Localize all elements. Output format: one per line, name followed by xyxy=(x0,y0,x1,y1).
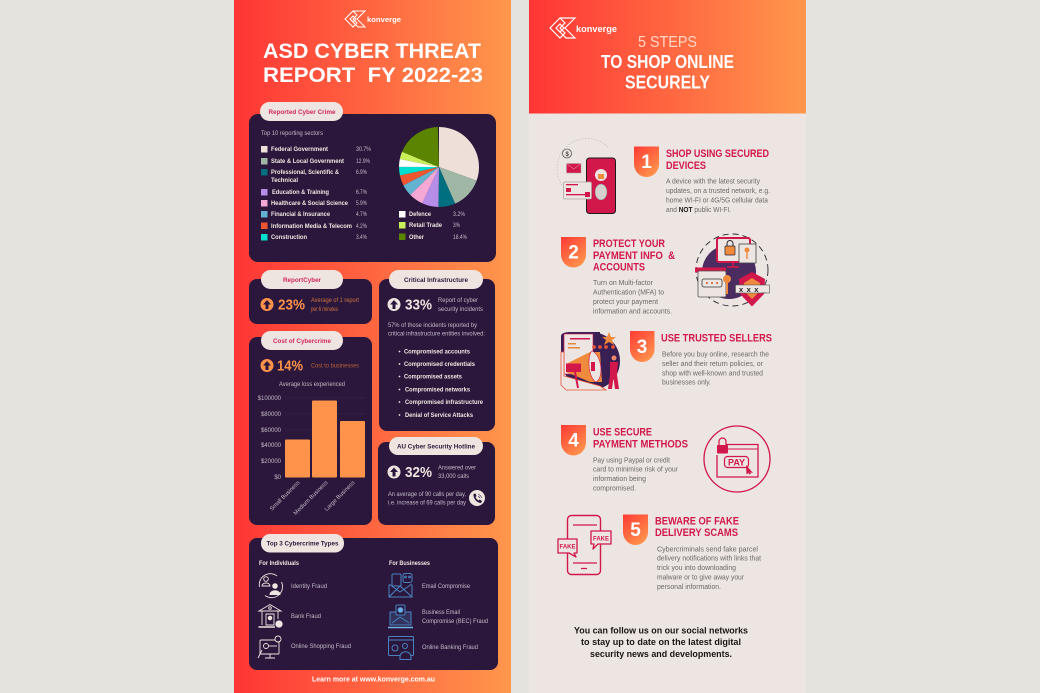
description: reports: Average of 1 report xyxy=(311,297,359,304)
legend: sectors: 6.9% xyxy=(356,169,367,176)
badge: 5 xyxy=(623,514,648,545)
closing message: You can follow us on our social networks xyxy=(574,626,748,636)
heading: step 2: PROTECT YOUR xyxy=(593,238,665,250)
panel: 5 steps xyxy=(529,0,806,693)
badge: 5: 5 xyxy=(630,520,641,541)
icon: secure payment: PAY xyxy=(728,458,745,468)
icon: fake messages phone: FAKE xyxy=(559,544,576,550)
step 4 xyxy=(561,425,770,492)
heading: 5 steps: SECURELY xyxy=(625,72,710,92)
text: step 1 xyxy=(666,176,770,214)
pill heading: hotline: AU Cyber Security Hotline xyxy=(397,444,475,450)
list: compromised items: Compromised credentials xyxy=(404,361,475,368)
heading: step 2: ACCOUNTS xyxy=(593,262,645,274)
text: step 2: information and accounts. xyxy=(593,306,672,316)
badge: 3 xyxy=(630,331,654,362)
text: step 5: trick you into downloading xyxy=(657,563,736,572)
legend: sectors: 4.7% xyxy=(356,211,367,218)
legend: sectors: Healthcare & Social Science xyxy=(271,200,348,207)
heading: 5 steps: TO SHOP ONLINE xyxy=(601,52,734,72)
legend: sectors: 30.7% xyxy=(356,146,371,153)
legend: sectors: Other xyxy=(409,234,424,241)
list: compromised items: Compromised assets xyxy=(404,374,462,380)
text: step 3: Before you buy online, research the xyxy=(662,350,769,358)
text: bank fraud: Bank Fraud xyxy=(291,613,321,620)
legend: sectors: 6.7% xyxy=(356,189,367,196)
text: step 5: malware or to give away your xyxy=(657,572,744,582)
legend: sectors: State & Local Government xyxy=(271,158,345,165)
legend: sectors xyxy=(261,146,467,241)
stat: 33%: 33% xyxy=(405,298,432,314)
description: cost: Cost to businesses xyxy=(311,362,359,370)
badge: 4: 4 xyxy=(568,430,579,452)
heading: step 4: PAYMENT METHODS xyxy=(593,438,688,450)
description: calls answered: 33,000 calls xyxy=(438,473,469,480)
badge: 3: 3 xyxy=(637,337,647,358)
title xyxy=(263,39,483,87)
bar chart: average loss: $60000 xyxy=(261,428,282,434)
pill heading: cost of cybercrime: Cost of Cybercrime xyxy=(273,338,331,345)
icon: passwords and security: x x x _ xyxy=(739,285,767,294)
pill heading: top 3: Top 3 Cybercrime Types xyxy=(266,540,339,548)
icon: email compromise xyxy=(389,574,412,597)
text: step 1: home WI-FI or 4G/5G cellular data xyxy=(666,196,769,204)
stat: 23%: 23% xyxy=(278,298,305,314)
text: step 5 xyxy=(657,544,762,591)
stat: 14%: 14% xyxy=(277,358,303,374)
logo: konverge xyxy=(550,18,617,38)
heading: step 5: DELIVERY SCAMS xyxy=(655,527,738,539)
icon: identity fraud xyxy=(259,574,283,598)
legend: sectors: Defence xyxy=(409,211,431,218)
text: incidents intro xyxy=(388,322,485,338)
text: business email compromise: Compromise (BEC) Fraud xyxy=(422,618,488,625)
bar chart: average loss: Large Business xyxy=(324,480,356,513)
subheading: for businesses: For Businesses xyxy=(389,560,430,567)
legend: sectors: Construction xyxy=(271,234,307,241)
panel: AU cyber security hotline xyxy=(378,437,495,525)
list: compromised items: Denial of Service Attacks xyxy=(405,412,473,419)
text: incidents intro: critical infrastructure entities involved: xyxy=(388,330,485,338)
text: business email compromise: Business Email xyxy=(422,609,460,616)
bar chart: average loss: Medium Business xyxy=(293,480,329,517)
pill heading: reported cyber crime: Reported Cyber Crime xyxy=(268,109,336,116)
text: step 1: updates, on a trusted network, e.g. xyxy=(666,186,770,195)
text: step 4 xyxy=(593,456,678,492)
logo: konverge header: konverge xyxy=(367,15,401,24)
pill heading: critical infrastructure xyxy=(389,270,483,289)
heading: step 3: USE TRUSTED SELLERS xyxy=(661,332,772,344)
icon: megaphone and reviews xyxy=(561,332,620,390)
panel: top 3 cybercrime types xyxy=(249,534,498,670)
heading: step 1: DEVICES xyxy=(666,160,706,172)
legend: sectors: Professional, Scientific & xyxy=(271,169,339,176)
header band xyxy=(529,0,806,114)
icon: business email compromise xyxy=(388,605,413,628)
bar chart: average loss xyxy=(258,381,365,517)
text: identity fraud: Identity Fraud xyxy=(291,583,327,590)
stat: 32%: 32% xyxy=(405,465,432,481)
description: calls answered xyxy=(438,464,477,480)
legend: sectors: Information Media & Telecom xyxy=(271,223,352,230)
legend: sectors: Education & Training xyxy=(272,189,329,196)
panel: cost of cybercrime xyxy=(249,331,372,525)
text: step 2: Authentication (MFA) to xyxy=(593,288,664,296)
heading: step 1 xyxy=(666,148,769,172)
text: step 4: Pay using Paypal or credit xyxy=(593,456,671,464)
text: calls per day: An average of 90 calls per day, xyxy=(388,491,466,498)
step 2 xyxy=(561,234,770,316)
description: incidents: security incidents xyxy=(438,306,483,313)
panel: reported cyber crime xyxy=(249,102,496,262)
heading: step 4 xyxy=(593,426,688,450)
list: compromised items xyxy=(399,348,483,419)
heading: 5 steps xyxy=(601,34,734,92)
step 1 xyxy=(557,138,770,214)
closing message: security news and developments. xyxy=(590,649,732,660)
heading: step 2: PAYMENT INFO & xyxy=(593,250,675,262)
bar chart: average loss: Small Business xyxy=(269,480,301,512)
badge: 1: 1 xyxy=(641,152,652,173)
pill heading: ReportCyber: ReportCyber xyxy=(283,277,321,284)
step 5 xyxy=(558,514,762,591)
bar chart: average loss: $80000 xyxy=(261,412,282,418)
legend: sectors: 3.4% xyxy=(356,234,367,241)
heading: step 2 xyxy=(593,238,675,274)
text: step 2 xyxy=(593,278,672,316)
icon: phone xyxy=(469,490,485,506)
text: business email compromise xyxy=(422,609,488,625)
icon: secure phone xyxy=(557,138,616,214)
icon: up arrow xyxy=(260,298,274,311)
badge: 1 xyxy=(634,146,659,177)
icon: up arrow xyxy=(260,359,274,372)
text: step 2: protect your payment xyxy=(593,297,659,306)
legend: sectors: 5.9% xyxy=(356,200,367,207)
bar chart: average loss: $0 xyxy=(274,475,282,481)
legend: sectors: Financial & Insurance xyxy=(271,211,330,218)
icon: online banking fraud xyxy=(388,636,414,660)
list: compromised items: Compromised networks xyxy=(405,386,470,394)
legend: sectors: 3% xyxy=(453,222,460,229)
description: incidents: Report of cyber xyxy=(438,297,479,304)
list: compromised items: Compromised accounts xyxy=(404,348,470,356)
legend: sectors: Technical xyxy=(271,177,298,184)
icon: fake messages phone xyxy=(558,516,611,574)
pill heading: cost of cybercrime xyxy=(261,331,343,350)
subheading: top 10 sectors: Top 10 reporting sectors xyxy=(261,130,323,137)
description: reports xyxy=(311,297,359,313)
bar chart: average loss: $20000 xyxy=(261,459,282,465)
icon: fake messages phone: FAKE xyxy=(593,536,609,542)
legend: sectors: Retail Trade xyxy=(409,222,442,229)
heading: step 5 xyxy=(655,516,739,539)
legend: sectors: 4.2% xyxy=(356,223,367,230)
description: calls answered: Answered over xyxy=(438,464,477,472)
text: step 3: seller and their return policies, or xyxy=(662,359,763,368)
text: online shopping fraud: Online Shopping Fraud xyxy=(291,643,351,650)
text: calls per day: i.e. increase of 69 calls per day xyxy=(388,500,467,506)
badge: 4 xyxy=(561,425,586,456)
icon: bank fraud xyxy=(258,604,282,627)
icon: online shopping fraud xyxy=(258,636,281,658)
bar chart: average loss: $40000 xyxy=(261,443,282,449)
description: reports: per 6 minutes xyxy=(311,306,338,313)
heading: step 4: USE SECURE xyxy=(593,426,652,438)
text: step 4: information being xyxy=(593,474,646,483)
closing message: to stay up to date on the latest digital xyxy=(581,637,741,648)
icon: up arrow xyxy=(388,298,400,311)
panel: ASD cyber threat report xyxy=(234,0,511,693)
logo: konverge header xyxy=(345,11,401,27)
badge: 2: 2 xyxy=(568,242,579,264)
text: step 5: delivery notifications with links that xyxy=(657,554,762,562)
text: incidents intro: 57% of those incidents reported by xyxy=(388,322,478,329)
pill heading: critical infrastructure: Critical Infrastructure xyxy=(404,277,468,284)
icon: up arrow xyxy=(388,466,400,478)
text: step 3: businesses only. xyxy=(662,378,711,386)
subheading: for individuals: For Individuals xyxy=(259,560,299,567)
legend: sectors: 12.9% xyxy=(356,158,370,165)
text: step 1: A device with the latest security xyxy=(666,176,760,186)
panel: critical infrastructure xyxy=(379,270,495,431)
text: step 5: personal information. xyxy=(657,582,721,591)
icon: secure payment xyxy=(704,426,770,492)
text: step 2: Turn on Multi-factor xyxy=(593,278,653,287)
text: step 4: card to minimise risk of your xyxy=(593,464,678,474)
legend: sectors: Federal Government xyxy=(271,146,329,153)
text: step 5: Cybercriminals send fake parcel xyxy=(657,544,758,554)
title: REPORT FY 2022-23 xyxy=(263,63,483,87)
heading: step 5: BEWARE OF FAKE xyxy=(655,516,739,528)
badge: 2 xyxy=(561,237,586,268)
text: step 4: compromised. xyxy=(593,484,636,492)
text: online banking fraud: Online Banking Fraud xyxy=(422,644,478,651)
text: step 3 xyxy=(662,350,769,386)
title: ASD CYBER THREAT xyxy=(263,39,481,63)
text: step 3: shop with well-known and trusted xyxy=(662,368,763,378)
link: learn more: Learn more at www.konverge.com.au xyxy=(312,676,435,684)
text: email compromise: Email Compromise xyxy=(422,583,470,590)
legend: sectors: 18.4% xyxy=(453,234,467,241)
text: calls per day xyxy=(388,491,467,506)
heading: 5 steps: 5 STEPS xyxy=(638,34,697,51)
heading: step 1: SHOP USING SECURED xyxy=(666,148,769,160)
closing message xyxy=(574,626,748,660)
list: compromised items: Compromised infrastructure xyxy=(405,399,483,406)
bar chart: average loss: Average loss experienced xyxy=(279,381,345,388)
text: step 1: and NOT public WI-FI. xyxy=(666,205,731,214)
bar chart: average loss: $100000 xyxy=(258,396,282,402)
step 3 xyxy=(561,331,772,390)
icon: secure phone: $ xyxy=(566,152,570,158)
description: incidents xyxy=(438,297,483,313)
panel: ReportCyber xyxy=(249,270,372,324)
icon: passwords and security xyxy=(695,234,770,306)
logo: konverge: konverge xyxy=(576,24,617,34)
pie chart: sector shares xyxy=(419,147,459,187)
legend: sectors: 3.2% xyxy=(453,211,465,218)
pill heading: top 3 xyxy=(261,534,344,552)
pill heading: reported cyber crime xyxy=(260,102,343,121)
